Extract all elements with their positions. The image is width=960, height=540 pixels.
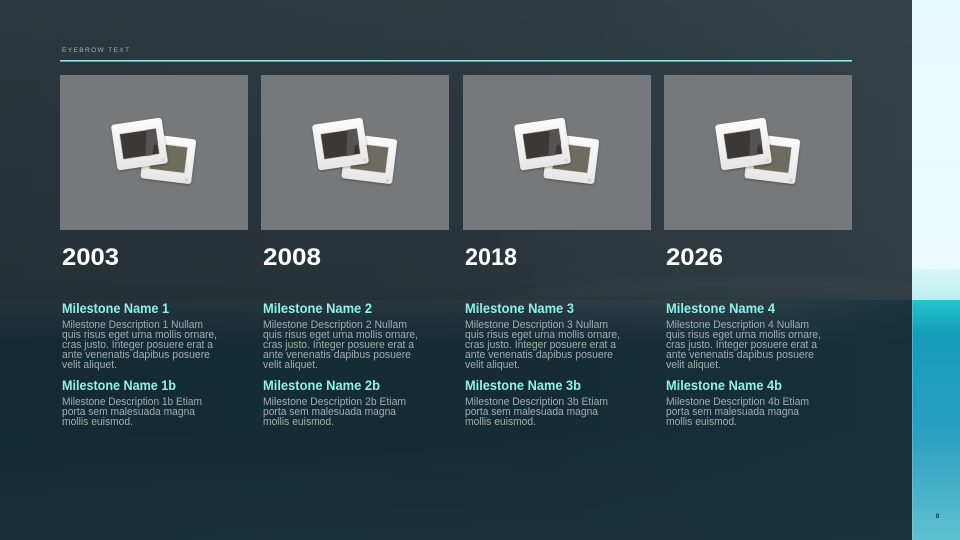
milestone description 3: ante venenatis dapibus posuere [465, 349, 613, 361]
milestone description 3: velit aliquet. [465, 359, 520, 371]
milestone description 3 [465, 319, 620, 371]
page number: 8 [936, 513, 940, 520]
milestone name 4: Milestone Name 4 [666, 300, 775, 316]
milestone description 2: velit aliquet. [263, 359, 318, 371]
milestone description 4b: mollis euismod. [666, 416, 737, 428]
milestone description 1: ante venenatis dapibus posuere [62, 349, 210, 361]
milestone description 2 [263, 319, 418, 371]
column 4 [664, 75, 852, 428]
milestone description 1b: Milestone Description 1b Etiam [62, 396, 202, 408]
right sidebar [912, 0, 960, 540]
milestone description 3: quis risus eget urna mollis ornare, [465, 329, 620, 341]
milestone description 4b: porta sem malesuada magna [666, 406, 799, 418]
milestone description 4b: Milestone Description 4b Etiam [666, 396, 809, 408]
milestone description 4: velit aliquet. [666, 359, 721, 371]
milestone name 4b: Milestone Name 4b [666, 377, 782, 393]
milestone name 2: Milestone Name 2 [263, 300, 372, 316]
year 1: 2003 [62, 244, 119, 271]
icon: photo slides 4 [715, 117, 800, 184]
milestone description 1b [62, 396, 202, 428]
milestone description 2: quis risus eget urna mollis ornare, [263, 329, 418, 341]
image placeholder 2 [261, 75, 449, 230]
milestone description 2b: mollis euismod. [263, 416, 334, 428]
milestone name 2b: Milestone Name 2b [263, 377, 380, 393]
image placeholder 4 [664, 75, 852, 230]
milestone description 1: quis risus eget urna mollis ornare, [62, 329, 217, 341]
milestone description 1b: porta sem malesuada magna [62, 406, 195, 418]
image placeholder 3 [463, 75, 651, 230]
milestone description 2: Milestone Description 2 Nullam [263, 319, 407, 331]
milestone description 4: Milestone Description 4 Nullam [666, 319, 809, 331]
column 3 [463, 75, 651, 428]
year 2: 2008 [263, 244, 321, 271]
icon: photo slides 3 [514, 117, 599, 184]
milestone description 3b [465, 396, 608, 428]
milestone description 3b: mollis euismod. [465, 416, 536, 428]
milestone description 4: ante venenatis dapibus posuere [666, 349, 814, 361]
milestone description 1: Milestone Description 1 Nullam [62, 319, 203, 331]
milestone description 4: quis risus eget urna mollis ornare, [666, 329, 821, 341]
milestone description 1b: mollis euismod. [62, 416, 133, 428]
year 3: 2018 [465, 244, 517, 271]
icon: photo slides 1 [111, 117, 196, 184]
milestone name 1b: Milestone Name 1b [62, 377, 176, 393]
icon: photo slides 2 [312, 117, 397, 184]
milestone description 4b [666, 396, 809, 428]
milestone description 4: cras justo. Integer posuere erat a [666, 339, 817, 351]
milestone description 3: cras justo. Integer posuere erat a [465, 339, 616, 351]
milestone description 1: velit aliquet. [62, 359, 117, 371]
milestone description 2: ante venenatis dapibus posuere [263, 349, 411, 361]
milestone name 3: Milestone Name 3 [465, 300, 574, 316]
background: dark sea [0, 280, 912, 540]
column 1 [60, 75, 248, 428]
column 2 [261, 75, 449, 428]
milestone description 2: cras justo. Integer posuere erat a [263, 339, 414, 351]
header rule [60, 60, 852, 62]
milestone description 1: cras justo. Integer posuere erat a [62, 339, 213, 351]
milestone description 3: Milestone Description 3 Nullam [465, 319, 608, 331]
milestone description 2b: porta sem malesuada magna [263, 406, 396, 418]
milestone description 2b: Milestone Description 2b Etiam [263, 396, 406, 408]
milestone name 1: Milestone Name 1 [62, 300, 169, 316]
year 4: 2026 [666, 244, 723, 271]
milestone description 3b: porta sem malesuada magna [465, 406, 598, 418]
milestone description 1 [62, 319, 217, 371]
milestone description 2b [263, 396, 406, 428]
eyebrow text: EYEBROW TEXT [62, 47, 129, 54]
image placeholder 1 [60, 75, 248, 230]
milestone description 4 [666, 319, 821, 371]
milestone description 3b: Milestone Description 3b Etiam [465, 396, 608, 408]
milestone name 3b: Milestone Name 3b [465, 377, 581, 393]
